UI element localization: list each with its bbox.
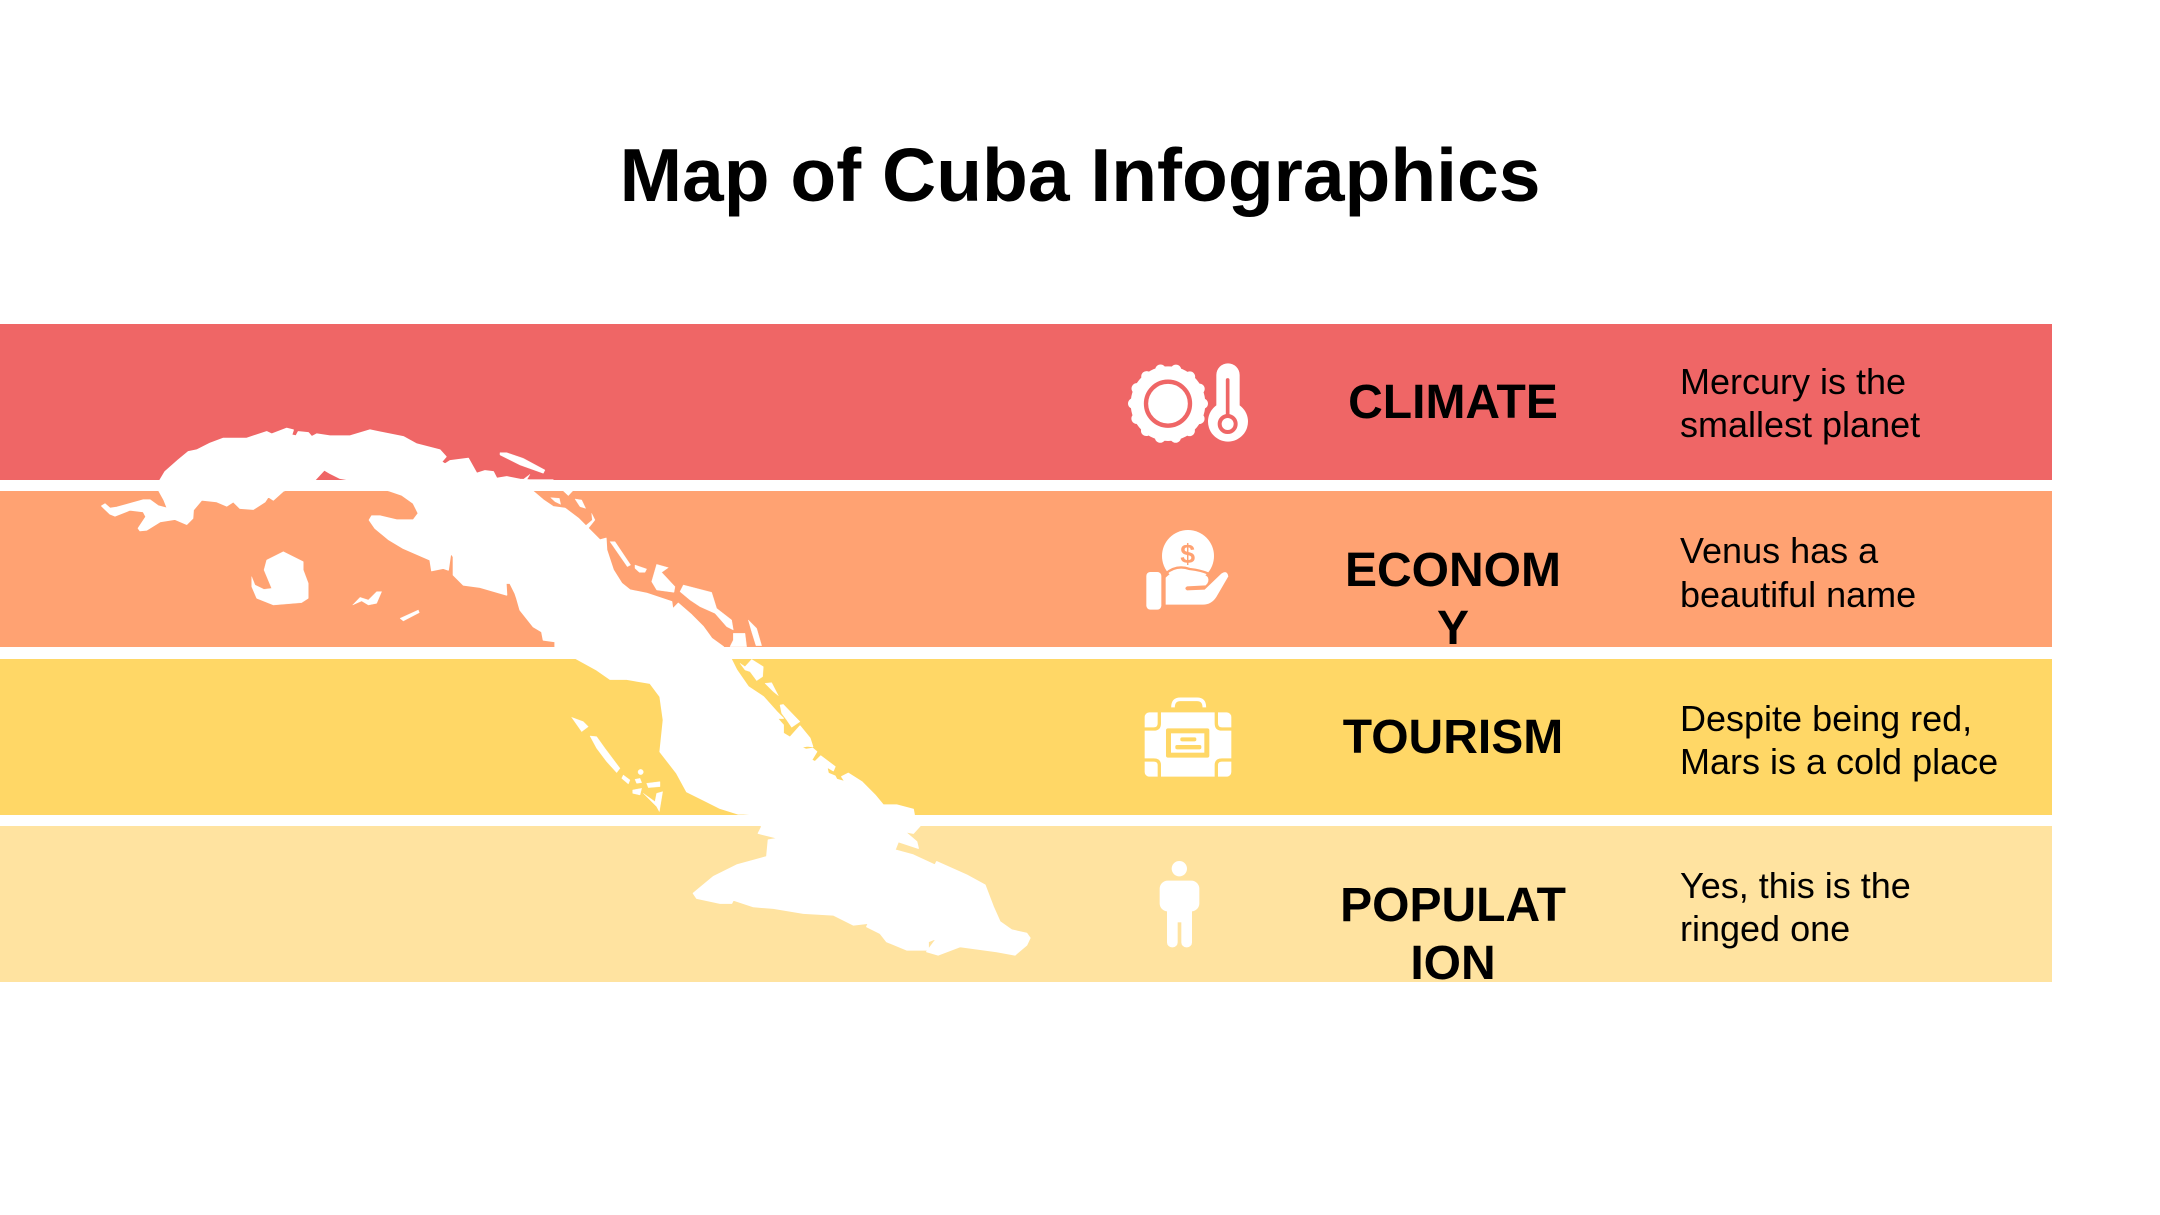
title: Map of Cuba Infographics [620,133,1540,217]
text: climate description: Mercury is the [1680,361,1906,402]
text: economy description: Venus has a [1680,530,1878,571]
icon: suitcase [1144,698,1232,777]
text: climate description [1680,361,1920,445]
text: tourism description: Mars is a cold place [1680,741,1998,782]
panel: population [0,826,2052,982]
heading: economy: ECONOM [1345,544,1561,597]
heading: economy [1345,544,1561,655]
text: economy description: beautiful name [1680,574,1916,615]
north cays near the top band [500,453,545,480]
Jardines de la Reina cays [572,717,663,812]
panel: tourism [0,659,2052,815]
heading: population: POPULAT [1340,878,1566,932]
text: population description [1680,865,1911,949]
text: economy description [1680,530,1916,615]
main island [102,428,1030,955]
heading: tourism: TOURISM [1343,711,1563,764]
heading: population [1340,878,1566,990]
text: population description: Yes, this is the [1680,865,1911,906]
island: Isla de la Juventud and small cays [252,552,419,621]
heading: economy: Y [1437,602,1469,655]
icon: hand holding coin: $ [1181,539,1196,569]
icon: hand holding coin [1146,530,1228,610]
eastern north-coast cays [740,659,800,727]
panel: economy [0,491,2052,647]
north-central cays [551,491,762,647]
text: climate description: smallest planet [1680,404,1920,445]
icon: person [1160,861,1200,948]
heading: population: ION [1410,936,1496,990]
icon: sun and thermometer [1128,363,1248,443]
heading: climate: CLIMATE [1348,376,1558,429]
panel: climate [0,324,2052,480]
text: population description: ringed one [1680,908,1850,949]
text: tourism description: Despite being red, [1680,698,1972,739]
text: tourism description [1680,698,1998,782]
